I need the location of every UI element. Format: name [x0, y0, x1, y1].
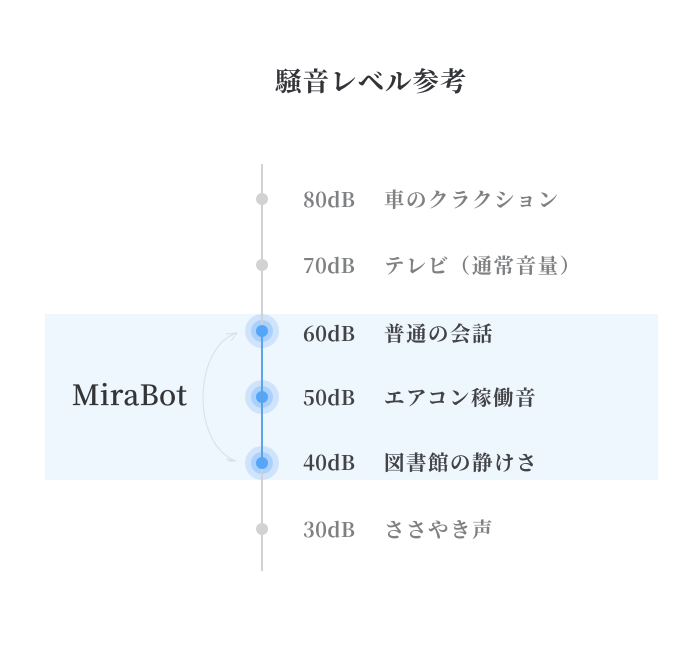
row: 60dB: 普通の会話: [384, 317, 494, 347]
row: 80dB: [256, 183, 560, 213]
row: 40dB: 図書館の静けさ: [384, 446, 538, 476]
title: 騒音レベル参考: [274, 60, 468, 99]
curved range arrow: [203, 333, 237, 461]
timeline axis: [261, 164, 263, 571]
row: 60dB: [245, 314, 494, 348]
row: 50dB: エアコン稼働音: [384, 381, 537, 411]
row: 30dB: ささやき声: [384, 513, 494, 543]
row: 60dB: 60dB: [303, 318, 355, 347]
row: 80dB: 80dB: [303, 184, 355, 213]
row: 30dB: 30dB: [303, 514, 355, 543]
label: MiraBot: MiraBot: [72, 374, 187, 414]
row: 30dB: [256, 513, 494, 543]
row: 50dB: 50dB: [303, 382, 355, 411]
row: 70dB: テレビ（通常音量）: [384, 249, 582, 279]
highlighted axis segment: [261, 331, 263, 463]
highlight band: [45, 314, 658, 480]
row: 40dB: 40dB: [303, 447, 355, 476]
row: 50dB: [245, 380, 537, 414]
row: 80dB: 車のクラクション: [384, 183, 560, 213]
row: 70dB: 70dB: [303, 250, 355, 279]
row: 40dB: [245, 446, 538, 480]
row: 70dB: [256, 249, 582, 279]
